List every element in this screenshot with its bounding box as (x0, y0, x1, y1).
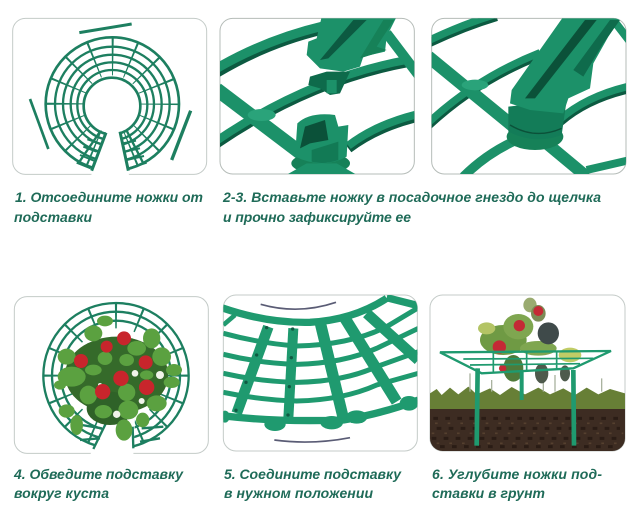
panel: step 4, stand around strawberry bush (14, 297, 208, 455)
caption: step 1: 1. Отсоедините ножки от (15, 189, 203, 205)
caption: step 4 (13, 466, 184, 501)
panel: step 5, connecting the stand (220, 295, 418, 451)
frame bars (217, 26, 418, 160)
caption: step 5: в нужном положении (224, 485, 373, 501)
caption: step 1: подставки (14, 209, 92, 225)
arrow: bottom (274, 438, 350, 442)
panel: step 6, stand in the ground (430, 295, 625, 452)
icon: stand with legs (440, 351, 611, 446)
caption: step 1 (14, 189, 203, 225)
icon: detached leg, top (79, 24, 132, 33)
arrow: top (261, 302, 336, 309)
icon: detached leg, left (30, 99, 48, 149)
caption: steps 2-3: 2-3. Вставьте ножку в посадочное гнездо до щелчка (222, 189, 601, 205)
caption: step 6 (432, 466, 602, 501)
caption: step 4: 4. Обведите подставку (13, 466, 184, 482)
icon: strawberry bush (54, 316, 182, 441)
icon: socket (288, 114, 356, 174)
caption: step 6: 6. Углубите ножки под- (432, 466, 602, 482)
icon: ring grid of the stand (46, 37, 179, 177)
caption: step 6: ставки в грунт (432, 485, 545, 501)
caption: step 5: 5. Соедините подставку (224, 466, 402, 482)
icon: detached leg, right (172, 111, 191, 160)
strawberries (74, 331, 154, 399)
panel: step 2, leg above socket (217, 17, 418, 177)
icon: ring around bush (43, 303, 189, 455)
panel: step 1, disassembled stand (13, 18, 207, 177)
icon: assembled leg and socket (507, 17, 622, 150)
caption: step 4: вокруг куста (14, 485, 109, 501)
caption: steps 2-3 (222, 189, 601, 225)
soil and grass (430, 373, 625, 452)
frame bars (428, 14, 630, 177)
panel: step 3, leg inserted (428, 14, 630, 177)
icon: leg with clip (307, 17, 397, 95)
caption: steps 2-3: и прочно зафиксируйте ее (223, 209, 411, 225)
icon: plant (478, 298, 581, 383)
caption: step 5 (224, 466, 402, 501)
fan grid of arcs and spokes (222, 298, 418, 421)
